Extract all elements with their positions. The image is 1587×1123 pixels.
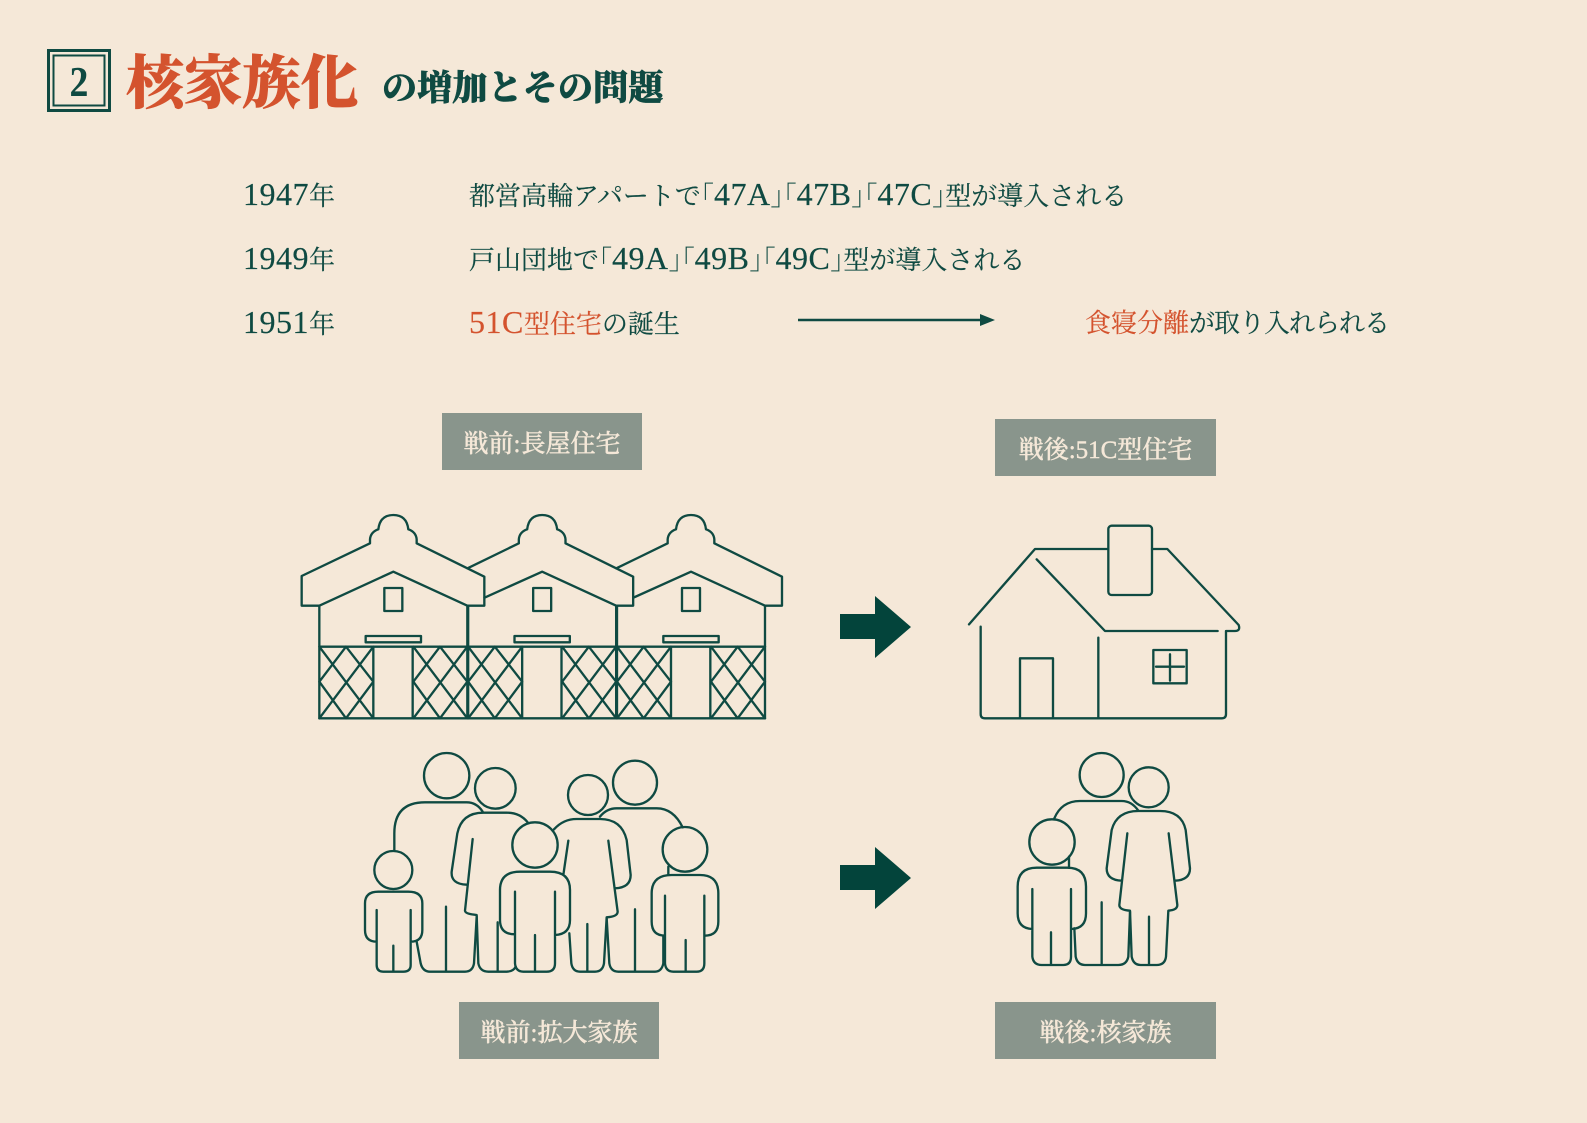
child left <box>365 851 422 972</box>
label: postwar nuclear family <box>995 1002 1216 1059</box>
timeline: 1947 year: 1947年 <box>243 176 335 212</box>
icon: row houses <box>302 515 782 718</box>
icon: nuclear family <box>1018 753 1190 965</box>
icon: modern house <box>969 526 1239 718</box>
icon: extended family <box>365 753 718 972</box>
grandmother <box>452 768 528 972</box>
section number badge <box>47 49 111 112</box>
child center <box>500 822 570 972</box>
child <box>1018 819 1086 965</box>
section number badge: 2 <box>70 58 88 105</box>
house 1 <box>302 515 484 718</box>
grandfather <box>394 753 483 972</box>
label: prewar extended family <box>459 1002 659 1059</box>
mother <box>554 775 631 972</box>
timeline arrow <box>798 314 995 326</box>
child right <box>652 827 718 972</box>
house 2 <box>467 515 633 718</box>
timeline: 1951 text: 51C型住宅の誕生 <box>469 304 680 340</box>
label: postwar 51C house <box>995 419 1216 476</box>
house 3 <box>616 515 782 718</box>
father <box>1054 753 1138 965</box>
arrow: houses <box>840 596 911 658</box>
mother <box>1107 767 1190 965</box>
timeline: 1949 text: 戸山団地で「49A」「49B」「49C」型が導入される <box>469 240 1025 276</box>
arrow: families <box>840 847 911 909</box>
label: prewar extended family: 戦前:拡大家族 <box>481 1020 637 1047</box>
label: postwar 51C house: 戦後:51C型住宅 <box>1019 437 1192 464</box>
timeline: result text: 食寝分離が取り入れられる <box>1085 309 1389 338</box>
label: postwar nuclear family: 戦後:核家族 <box>1040 1020 1171 1047</box>
timeline: 1951 year: 1951年 <box>243 304 335 340</box>
title: sub: の増加とその問題 <box>382 69 664 108</box>
label: prewar row house <box>442 413 642 470</box>
title: main: 核家族化 <box>126 51 359 116</box>
timeline: 1947 text: 都営高輪アパートで「47A」「47B」「47C」型が導入される <box>469 176 1127 212</box>
timeline: 1949 year: 1949年 <box>243 240 335 276</box>
father <box>600 761 683 972</box>
label: prewar row house: 戦前:長屋住宅 <box>464 431 620 458</box>
